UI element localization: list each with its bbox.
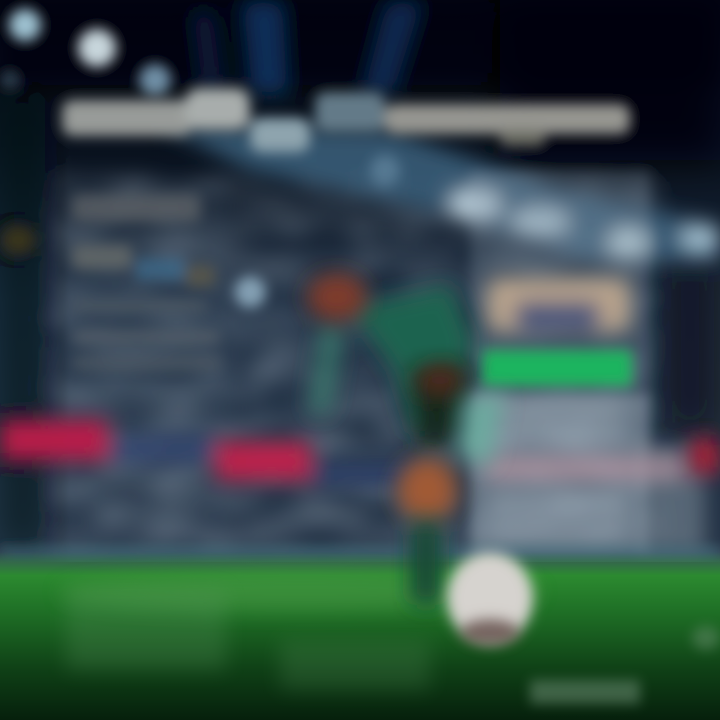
panel: left text	[62, 180, 232, 550]
football	[447, 552, 533, 645]
green bar	[482, 350, 632, 386]
blurred scene	[0, 0, 720, 562]
player lower leg	[410, 520, 442, 605]
player knee	[397, 458, 457, 522]
player torso	[350, 285, 472, 435]
player head	[307, 273, 367, 321]
advertising boards	[0, 420, 720, 484]
stadium background	[0, 0, 720, 550]
side glow	[0, 224, 36, 256]
stadium light beams	[190, 0, 425, 95]
player	[307, 273, 505, 605]
image block	[487, 278, 630, 332]
pitch	[0, 552, 720, 720]
player arm	[308, 320, 345, 414]
left text block	[72, 195, 220, 370]
right text lines	[485, 405, 685, 535]
pitch edge glow	[0, 546, 720, 562]
diagonal light rig	[160, 125, 720, 262]
floodlights	[0, 9, 400, 308]
title	[62, 88, 630, 152]
panel: right chart	[470, 170, 705, 555]
player shorts	[412, 365, 462, 450]
player sock	[455, 392, 505, 465]
